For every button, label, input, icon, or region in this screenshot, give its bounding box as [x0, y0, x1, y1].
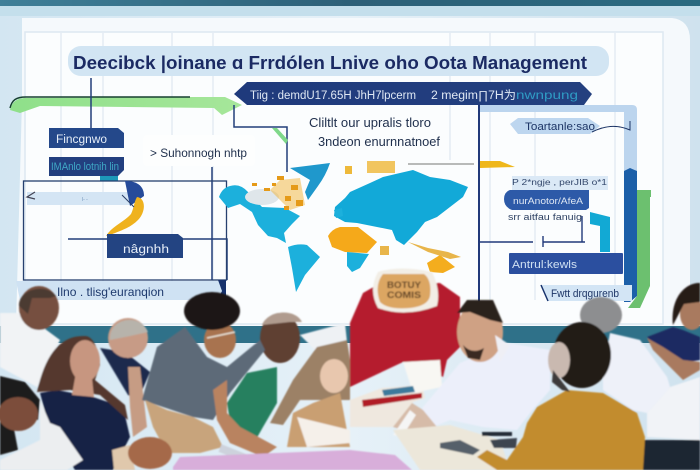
- bottom-left ribbon label: [16, 280, 226, 301]
- right stacked labels: srr aitfau fanuig: [508, 212, 582, 222]
- left connector lines: [68, 78, 287, 280]
- paper behind group: [300, 323, 347, 350]
- person: yellow sweater, back view: [477, 322, 645, 470]
- navy subtitle ribbon: nwnpung: [516, 90, 578, 102]
- title banner: Deecibck |oinane ɑ Frrdólen Lnive oho Oota Management: [73, 52, 587, 73]
- lower-left framed panel: [24, 181, 226, 280]
- person: woman right navy dress: [647, 283, 700, 380]
- person: man laughing, white shirt: [393, 300, 550, 437]
- foreground paper stack: [112, 445, 135, 470]
- bottom-left ribbon label: Ilno . tlisg'euranqion: [57, 285, 164, 299]
- map heading: [309, 116, 441, 149]
- label: nagnhh: nâgnhh: [123, 244, 169, 256]
- teal wall band: [0, 326, 700, 343]
- right connector spine: [408, 105, 585, 302]
- map heading: Cliltlt our upralis tloro: [309, 116, 431, 130]
- red chair: [350, 283, 460, 387]
- navy subtitle ribbon: [234, 82, 592, 105]
- calculators and devices: [440, 432, 517, 455]
- dark chair far right: [643, 440, 700, 470]
- table: [393, 425, 510, 470]
- right stacked labels: nurAnotor/AfeA: [513, 196, 584, 207]
- label: Fwtt drqgurenb: Fwtt drqgurenb: [551, 288, 619, 300]
- green swoosh arrow: [10, 97, 242, 115]
- label: nagnhh: [107, 234, 183, 258]
- people group: [0, 268, 700, 470]
- person: woman navy dress: [37, 336, 130, 470]
- right stacked labels: P 2*ngje , perJIB o*1: [512, 177, 607, 187]
- navy subtitle ribbon: Tiig : demdU17.65H JhH7lpcerm: [250, 90, 416, 102]
- branded bag label: [373, 268, 438, 313]
- person: white shirt far right: [647, 377, 700, 440]
- right stacked labels: [504, 176, 608, 222]
- label: Fwtt drqgurenb: [541, 285, 632, 301]
- person: central grey t-shirt: [142, 292, 277, 460]
- person: man back view grey hair: [580, 297, 670, 413]
- label: Fincgnwo: [49, 128, 124, 148]
- label: Antrul kewls: [509, 253, 623, 274]
- map heading: 3ndeon enurnnatnoef: [318, 135, 441, 149]
- label: Toartanle: [510, 118, 630, 134]
- branded bag label: COMIS: [387, 290, 421, 300]
- pink foreground table: [173, 450, 412, 470]
- yellow and blue swoosh icon: [106, 181, 144, 236]
- title banner: [68, 46, 609, 76]
- callout: Suhonnogh: [143, 135, 255, 166]
- label: Fincgnwo: Fincgnwo: [56, 134, 107, 146]
- foreground brown object: [128, 437, 172, 469]
- blue and green pillars: [624, 168, 651, 308]
- teal L-shape: [590, 212, 610, 252]
- person: older man: [260, 313, 302, 363]
- right light-blue frame: [480, 105, 637, 172]
- yellow pointer: [480, 161, 515, 168]
- branded bag label: BOTUY: [387, 280, 421, 290]
- navy subtitle ribbon: 2 megim∏7H为: [431, 89, 516, 102]
- green accent: [272, 128, 288, 144]
- label: teal text box: IMAnlo lotnih lin: [51, 161, 119, 173]
- person: grey-haired man: [100, 318, 150, 437]
- person: girl long hair: [270, 340, 350, 447]
- callout: Suhonnogh: > Suhonnogh nhtp: [150, 146, 247, 160]
- label: Toartanle: Toartanle:sao: [525, 121, 595, 133]
- chair: green: [227, 367, 277, 450]
- world map: [219, 161, 468, 292]
- laptop and notes: [350, 360, 442, 427]
- person: woman white coat lower left: [0, 376, 83, 470]
- person: man left with white shirt: [0, 286, 60, 387]
- label: Antrul kewls: Antrul:kewls: [512, 259, 578, 271]
- label: teal text box: [49, 157, 124, 181]
- lower-left framed panel: l- -: [82, 197, 88, 203]
- whiteboard panel: [16, 18, 690, 326]
